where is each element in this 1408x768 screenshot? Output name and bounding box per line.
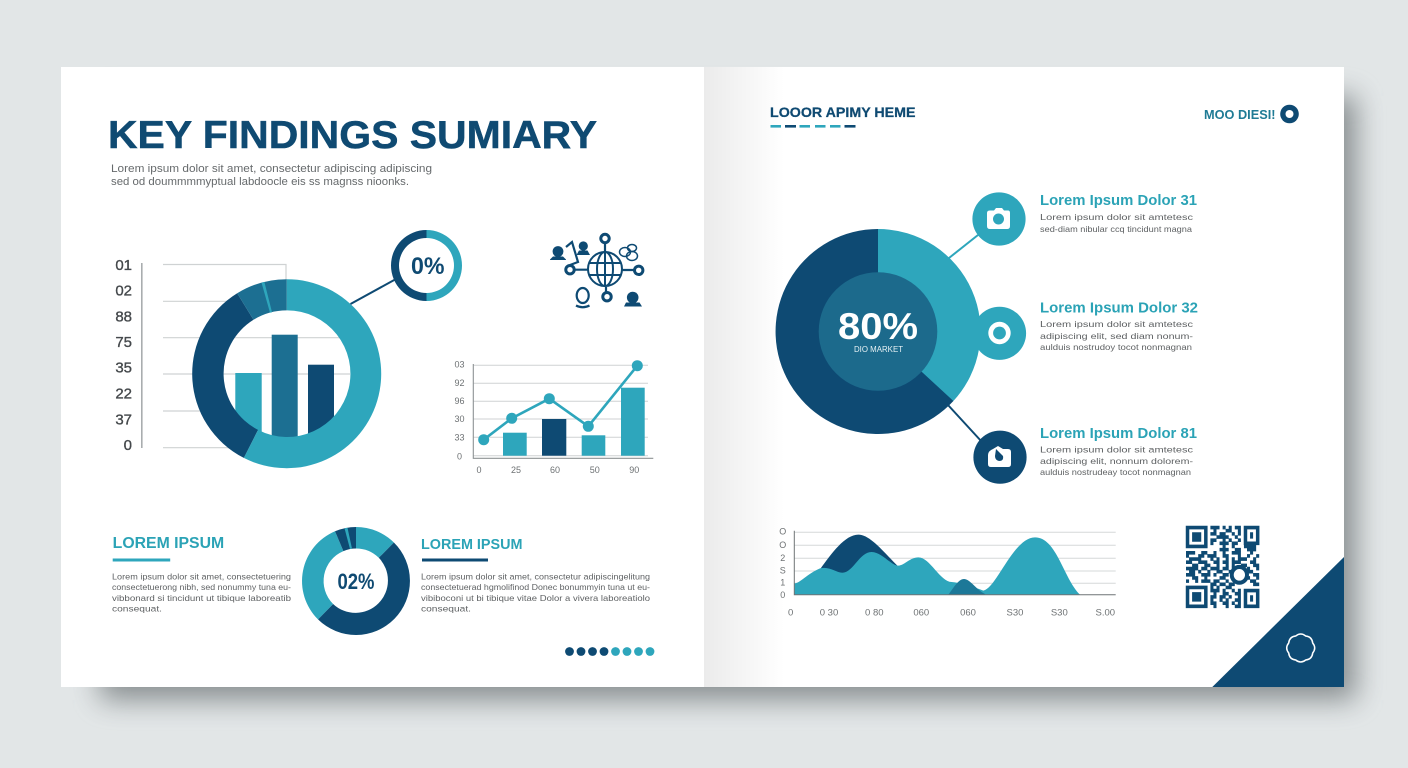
chart: 80% pie [776, 229, 981, 434]
body [1040, 212, 1194, 234]
x labels: 25 [511, 465, 521, 475]
body: adipiscing elit, sed diam nonum- [1040, 331, 1193, 341]
teal segment [878, 229, 981, 401]
body [1040, 319, 1194, 352]
dark segment [776, 229, 953, 434]
body: consectetuerad hgmolifinod Donec bonummyin tuna ut eu- [421, 582, 650, 592]
y labels: 1 [780, 578, 785, 588]
x labels [788, 608, 1115, 618]
page shadow [100, 96, 1356, 700]
x labels: 0 [788, 608, 793, 618]
ring [391, 230, 462, 301]
item: dolor 31 [972, 192, 1197, 246]
chart: combo bars and line [454, 360, 653, 475]
body: aulduis nostrudoy tocot nonmagnan [1040, 342, 1192, 352]
inner bars [235, 334, 334, 437]
grid lines [163, 264, 350, 448]
value labels: 01 [115, 257, 132, 274]
x labels [476, 465, 639, 475]
body: Lorem ipsum dolor sit amtetesc [1040, 212, 1194, 222]
body [1040, 444, 1194, 477]
text block: right lorem ipsum [421, 536, 650, 614]
QR code [1186, 528, 1259, 606]
value labels: 37 [115, 412, 132, 428]
cluster [620, 244, 638, 260]
y labels: 03 [454, 360, 465, 370]
y labels: 30 [454, 414, 465, 424]
heading: Lorem Ipsum Dolor 81 [1040, 426, 1197, 442]
intro text [111, 163, 432, 188]
title: KEY FINDINGS SUMIARY [108, 114, 597, 157]
y labels: 92 [454, 378, 465, 388]
y labels: 2 [780, 553, 785, 563]
logo mark [1204, 105, 1299, 123]
heading text: LOOOR APIMY HEME [770, 104, 916, 120]
value labels: 35 [115, 360, 132, 376]
body: aulduis nostrudeay tocot nonmagnan [1040, 467, 1191, 477]
value: 80% [838, 306, 918, 347]
x labels: 60 [550, 465, 560, 475]
heading: Lorem Ipsum Dolor 31 [1040, 193, 1197, 209]
chart: donut with bars and value scale [115, 257, 381, 468]
value labels: 75 [115, 334, 132, 351]
icon [973, 431, 1027, 484]
icon: scalloped badge [1287, 634, 1315, 662]
underline [113, 558, 170, 562]
dashes [770, 125, 856, 128]
heading: Lorem Ipsum Dolor 32 [1040, 300, 1198, 316]
heading: LOREM IPSUM [113, 535, 224, 552]
connector lines [948, 235, 982, 442]
y labels: 33 [454, 432, 465, 442]
areas [794, 535, 1080, 595]
donut segments [302, 527, 410, 635]
donut ring [192, 279, 381, 468]
value: 02% [338, 569, 374, 594]
people [550, 241, 642, 306]
x labels: 060 [960, 608, 976, 618]
icon: global network [550, 234, 643, 307]
teal area [794, 537, 1080, 595]
panel: left page [61, 67, 704, 687]
value labels [115, 257, 132, 454]
mid area [948, 579, 985, 595]
chart: small donut 02% [302, 527, 410, 635]
x labels: 90 [629, 465, 639, 475]
underline [422, 558, 488, 562]
connectors [566, 242, 634, 292]
y labels [454, 360, 465, 462]
logo text: MOO DIESI! [1204, 108, 1276, 122]
center disc [819, 272, 937, 391]
intro text: Lorem ipsum dolor sit amet, consectetur adipiscing adipiscing [111, 163, 432, 175]
dark area [820, 535, 898, 587]
body: vibiboconi ut bi tibique vitae Dolor a vivera laboreatiolo [421, 593, 650, 603]
value labels: 0 [124, 437, 132, 454]
corner triangle [1212, 557, 1344, 687]
callout: 0% ring [350, 230, 462, 304]
body: consequat. [421, 604, 471, 614]
body: consequat. [112, 604, 162, 614]
body: Lorem ipsum dolor sit amet, consectetur adipiscingelitung [421, 572, 650, 582]
grid [794, 532, 1116, 583]
nodes [566, 234, 643, 301]
x labels: 0 80 [865, 608, 884, 618]
panel: right page [704, 67, 1344, 687]
x labels: S.00 [1096, 608, 1115, 618]
body: adipiscing elit, nonnum dolorem- [1040, 456, 1193, 466]
body: vibbonard si tincidunt ut tibique laboreatib [112, 593, 291, 603]
globe [588, 252, 622, 286]
item: dolor 32 [988, 300, 1198, 352]
value labels: 22 [115, 386, 132, 402]
x labels: 060 [913, 608, 929, 618]
y labels: O [779, 526, 786, 536]
x labels: S30 [1007, 608, 1023, 618]
body: sed-diam nibular ccq tincidunt magna [1040, 224, 1192, 234]
header: right page heading [770, 104, 916, 128]
body: Lorem ipsum dolor sit amet, consectetuering [112, 572, 291, 582]
value labels: 02 [115, 282, 132, 300]
x labels: 50 [590, 465, 600, 475]
caption: DIO MARKET [854, 345, 903, 354]
value axis [141, 263, 143, 448]
pagination dots [565, 647, 654, 656]
y labels: 0 [457, 452, 462, 462]
heading: LOREM IPSUM [421, 536, 522, 553]
body [112, 572, 291, 614]
y labels: 96 [454, 396, 465, 406]
intro text: sed od doummmmyptual labdoocle eis ss magnss nioonks. [111, 176, 409, 188]
body: Lorem ipsum dolor sit amtetesc [1040, 319, 1194, 329]
chart: area chart [779, 526, 1116, 618]
outline head [576, 288, 590, 307]
body [421, 572, 650, 614]
logo icon [1280, 105, 1299, 123]
x labels: S30 [1051, 608, 1068, 618]
y labels: S [780, 566, 786, 576]
body: Lorem ipsum dolor sit amtetesc [1040, 444, 1194, 454]
y labels [779, 526, 786, 600]
bars [503, 388, 645, 456]
x labels: 0 30 [820, 608, 838, 618]
axes [473, 364, 653, 458]
grid [473, 365, 648, 456]
y labels: O [779, 540, 786, 550]
line series [478, 360, 643, 445]
value: 0% [411, 253, 444, 280]
x labels: 0 [476, 465, 482, 475]
icon [972, 192, 1026, 246]
item: dolor 81 [973, 426, 1197, 484]
y labels: 0 [780, 590, 785, 600]
circle 2 behind donut [973, 307, 1026, 360]
text block: left lorem ipsum [112, 535, 291, 614]
value labels: 88 [115, 308, 132, 326]
connector line [350, 279, 396, 304]
body: consectetuerong nibh, sed nonummy tuna eu- [112, 582, 291, 592]
icon [988, 322, 1011, 344]
axes [794, 531, 1116, 595]
